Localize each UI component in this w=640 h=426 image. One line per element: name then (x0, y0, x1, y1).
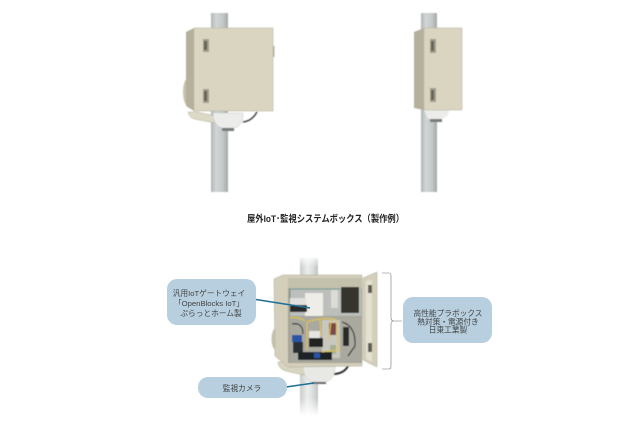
photo: closed box, front view (183, 13, 274, 192)
callout: gateway: ぷらっとホーム製 (180, 308, 242, 318)
camera dome (303, 366, 335, 382)
upper plate (290, 288, 361, 316)
vent (183, 78, 193, 106)
brace (382, 273, 402, 369)
callout: gateway (167, 279, 256, 325)
box side (414, 28, 424, 110)
terminal blocks (309, 331, 320, 340)
box interior (288, 278, 362, 363)
callout: box (403, 297, 492, 343)
blue device (292, 335, 302, 342)
camera lens (430, 119, 442, 122)
yellow wiring (290, 317, 339, 352)
lower latch (203, 89, 209, 103)
callout: camera (198, 377, 287, 398)
callout: box: 熱対策・電源付き (417, 316, 479, 326)
camera dome (424, 110, 449, 119)
upper latch (430, 39, 436, 53)
camera lens (312, 382, 326, 384)
box side (186, 28, 194, 111)
camera dome (213, 113, 243, 128)
pole (421, 13, 437, 192)
open door (363, 272, 377, 367)
leader line: gateway (256, 300, 310, 308)
cables (243, 112, 257, 122)
box front (424, 28, 462, 110)
mounting bracket (188, 112, 216, 123)
callout: box: 日東工業製 (429, 324, 468, 334)
photo: open box with electronics (272, 257, 377, 416)
box outer (274, 275, 362, 367)
hinge (273, 46, 274, 57)
box front (194, 28, 273, 111)
camera lens (222, 128, 234, 131)
black wiring (292, 322, 355, 356)
photo: closed box, side view (414, 13, 462, 192)
callout: gateway: 汎用IoTゲートウェイ (173, 289, 245, 298)
callout: camera: 監視カメラ (223, 383, 261, 393)
title: 屋外IoT･監視システムボックス（製作例） (247, 213, 404, 225)
upper latch (203, 39, 209, 52)
pole (300, 258, 318, 415)
lower plate (290, 317, 361, 362)
pole (211, 13, 228, 192)
vent (272, 328, 280, 350)
breaker unit (341, 287, 359, 313)
leader line: camera (286, 383, 314, 387)
lower latch (430, 88, 436, 102)
green wire (290, 289, 340, 300)
cables (333, 364, 349, 374)
callout: gateway: 「OpenBlocks IoT」 (174, 299, 244, 308)
callout: box: 高性能プラボックス (414, 308, 482, 318)
bracket (278, 362, 304, 375)
gateway device (305, 293, 323, 316)
